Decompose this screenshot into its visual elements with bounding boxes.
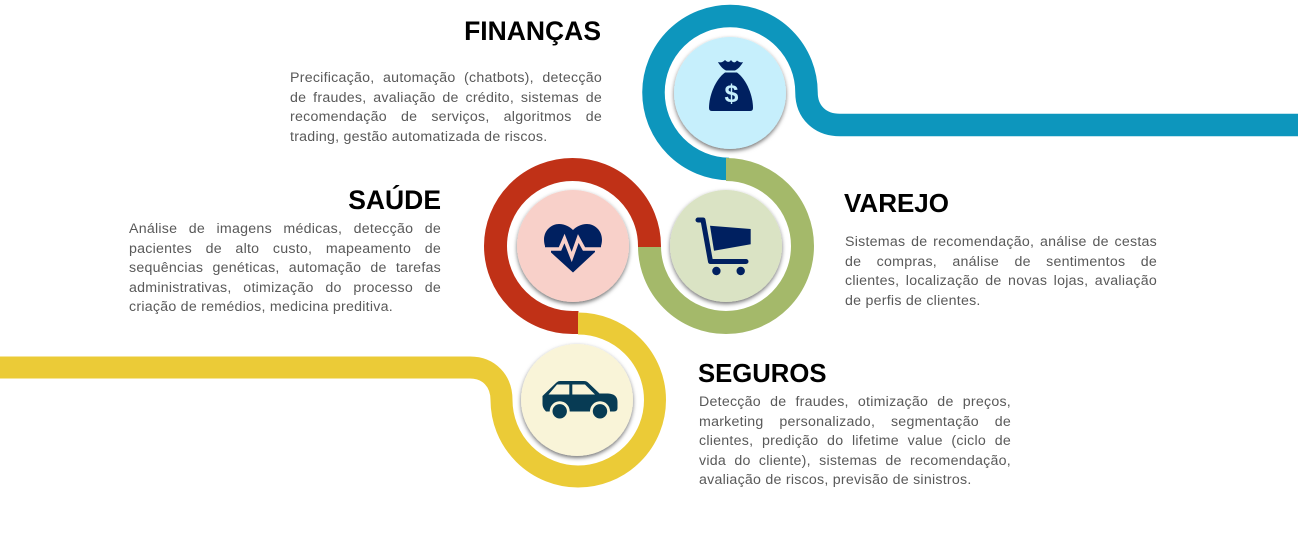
text: Saúde description: administrativas, otimização do processo de <box>129 280 441 296</box>
text: Finanças description: de fraudes, avaliação de crédito, sistemas de <box>290 90 602 106</box>
text: Finanças description <box>290 70 602 145</box>
heading: Finanças: FINANÇAS <box>464 16 601 46</box>
text: Varejo description: de perfis de clientes. <box>845 293 981 309</box>
heading: Saúde: SAÚDE <box>348 185 441 215</box>
text: Finanças description: trading, gestão automatizada de riscos. <box>290 129 547 145</box>
ribbon: red saude <box>496 170 650 322</box>
text: Seguros description: clientes, predição do lifetime value (ciclo de <box>699 433 1011 449</box>
ribbon: green varejo <box>650 170 802 322</box>
icon: shopping cart <box>698 220 751 275</box>
text: Seguros description: vida do cliente), sistemas de recomendação, <box>699 453 1011 469</box>
text: Saúde description: Análise de imagens médicas, detecção de <box>129 221 441 237</box>
ribbon: yellow seguros <box>0 324 655 476</box>
text: Finanças description: Precificação, automação (chatbots), detecção <box>290 70 602 86</box>
text: Saúde description <box>129 221 441 315</box>
text: Seguros description: Detecção de fraudes, otimização de preços, <box>699 394 1011 410</box>
heading: Varejo: VAREJO <box>844 188 949 218</box>
icon: car <box>542 381 618 421</box>
text: Seguros description <box>699 394 1011 488</box>
text: Varejo description <box>845 234 1157 309</box>
circle: seguros <box>521 344 633 456</box>
text: Saúde description: pacientes de alto custo, mapeamento de <box>129 241 441 257</box>
text: Varejo description: clientes, localização de novas lojas, avaliação <box>845 273 1157 289</box>
circle: saude <box>517 190 629 302</box>
text: Varejo description: de compras, análise de sentimentos de <box>845 254 1157 270</box>
text: Seguros description: avaliação de riscos, previsão de sinistros. <box>699 472 972 488</box>
circle: varejo <box>670 190 782 302</box>
icon: money bag: $ <box>725 80 739 108</box>
text: Saúde description: criação de remédios, medicina preditiva. <box>129 299 393 315</box>
icon: heart with pulse <box>538 224 608 272</box>
circle: financas <box>674 37 786 149</box>
ribbon: blue financas <box>654 16 1298 169</box>
heading: Seguros: SEGUROS <box>698 360 826 388</box>
text: Finanças description: recomendação de serviços, algoritmos de <box>290 109 602 125</box>
text: Saúde description: sequências genéticas, automação de tarefas <box>129 260 441 276</box>
text: Varejo description: Sistemas de recomendação, análise de cestas <box>845 234 1157 250</box>
text: Seguros description: marketing personalizado, segmentação de <box>699 414 1011 430</box>
icon: money bag <box>709 60 753 111</box>
